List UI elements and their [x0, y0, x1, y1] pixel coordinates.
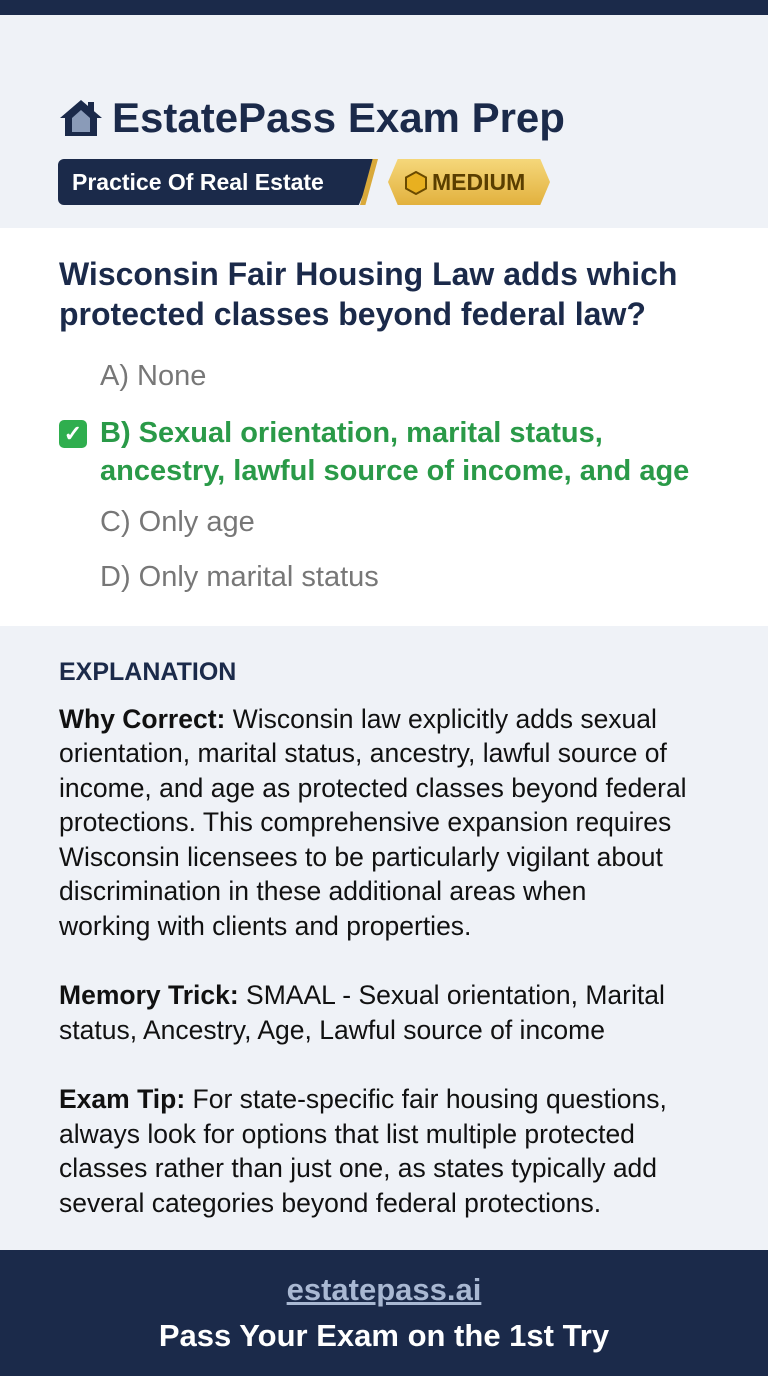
why correct: Why Correct: Wisconsin law explicitly adds sexual	[59, 704, 657, 734]
explanation panel	[59, 658, 687, 1218]
footer	[0, 1250, 768, 1376]
footer tagline: Pass Your Exam on the 1st Try	[159, 1318, 609, 1353]
option B correct: ancestry, lawful source of income, and age	[100, 455, 689, 487]
exam tip	[59, 1084, 667, 1218]
why correct: income, and age as protected classes beyond federal	[59, 772, 687, 802]
badge: difficulty	[388, 159, 550, 205]
option B correct: B) Sexual orientation, marital status,	[100, 417, 603, 449]
option B correct	[59, 417, 689, 487]
exam tip: classes rather than just one, as states typically add	[59, 1153, 657, 1183]
footer url: estatepass.ai	[287, 1272, 481, 1307]
memory trick: Memory Trick: SMAAL - Sexual orientation, Marital	[59, 980, 665, 1010]
why correct: orientation, marital status, ancestry, lawful source of	[59, 738, 667, 768]
why correct	[59, 704, 687, 940]
badge: difficulty: MEDIUM	[432, 169, 525, 195]
memory trick	[59, 980, 665, 1044]
header panel	[58, 100, 564, 205]
exam tip: always look for options that list multiple protected	[59, 1118, 635, 1148]
top bar	[0, 0, 768, 15]
why correct: Wisconsin licensees to be particularly vigilant about	[59, 842, 663, 872]
title: EstatePass Exam Prep	[112, 94, 565, 141]
badge: category: Practice Of Real Estate	[72, 169, 324, 195]
why correct: protections. This comprehensive expansion requires	[59, 807, 671, 837]
question panel	[0, 228, 768, 626]
exam tip: several categories beyond federal protections.	[59, 1188, 601, 1218]
icon: check: ✓	[64, 421, 82, 446]
icon: house	[60, 100, 102, 136]
option D: D) Only marital status	[100, 561, 379, 593]
question text: Wisconsin Fair Housing Law adds which protected classes beyond federal law?	[59, 256, 677, 332]
icon: check	[59, 420, 87, 448]
exam tip: Exam Tip: For state-specific fair housing questions,	[59, 1084, 667, 1114]
memory trick: status, Ancestry, Age, Lawful source of income	[59, 1014, 605, 1044]
badge: category	[58, 159, 378, 205]
option C: C) Only age	[100, 506, 255, 538]
explanation heading: EXPLANATION	[59, 658, 236, 686]
why correct: working with clients and properties.	[59, 910, 471, 940]
icon: hexagon	[405, 171, 427, 195]
option A: A) None	[100, 360, 206, 392]
why correct: discrimination in these additional areas when	[59, 876, 586, 906]
